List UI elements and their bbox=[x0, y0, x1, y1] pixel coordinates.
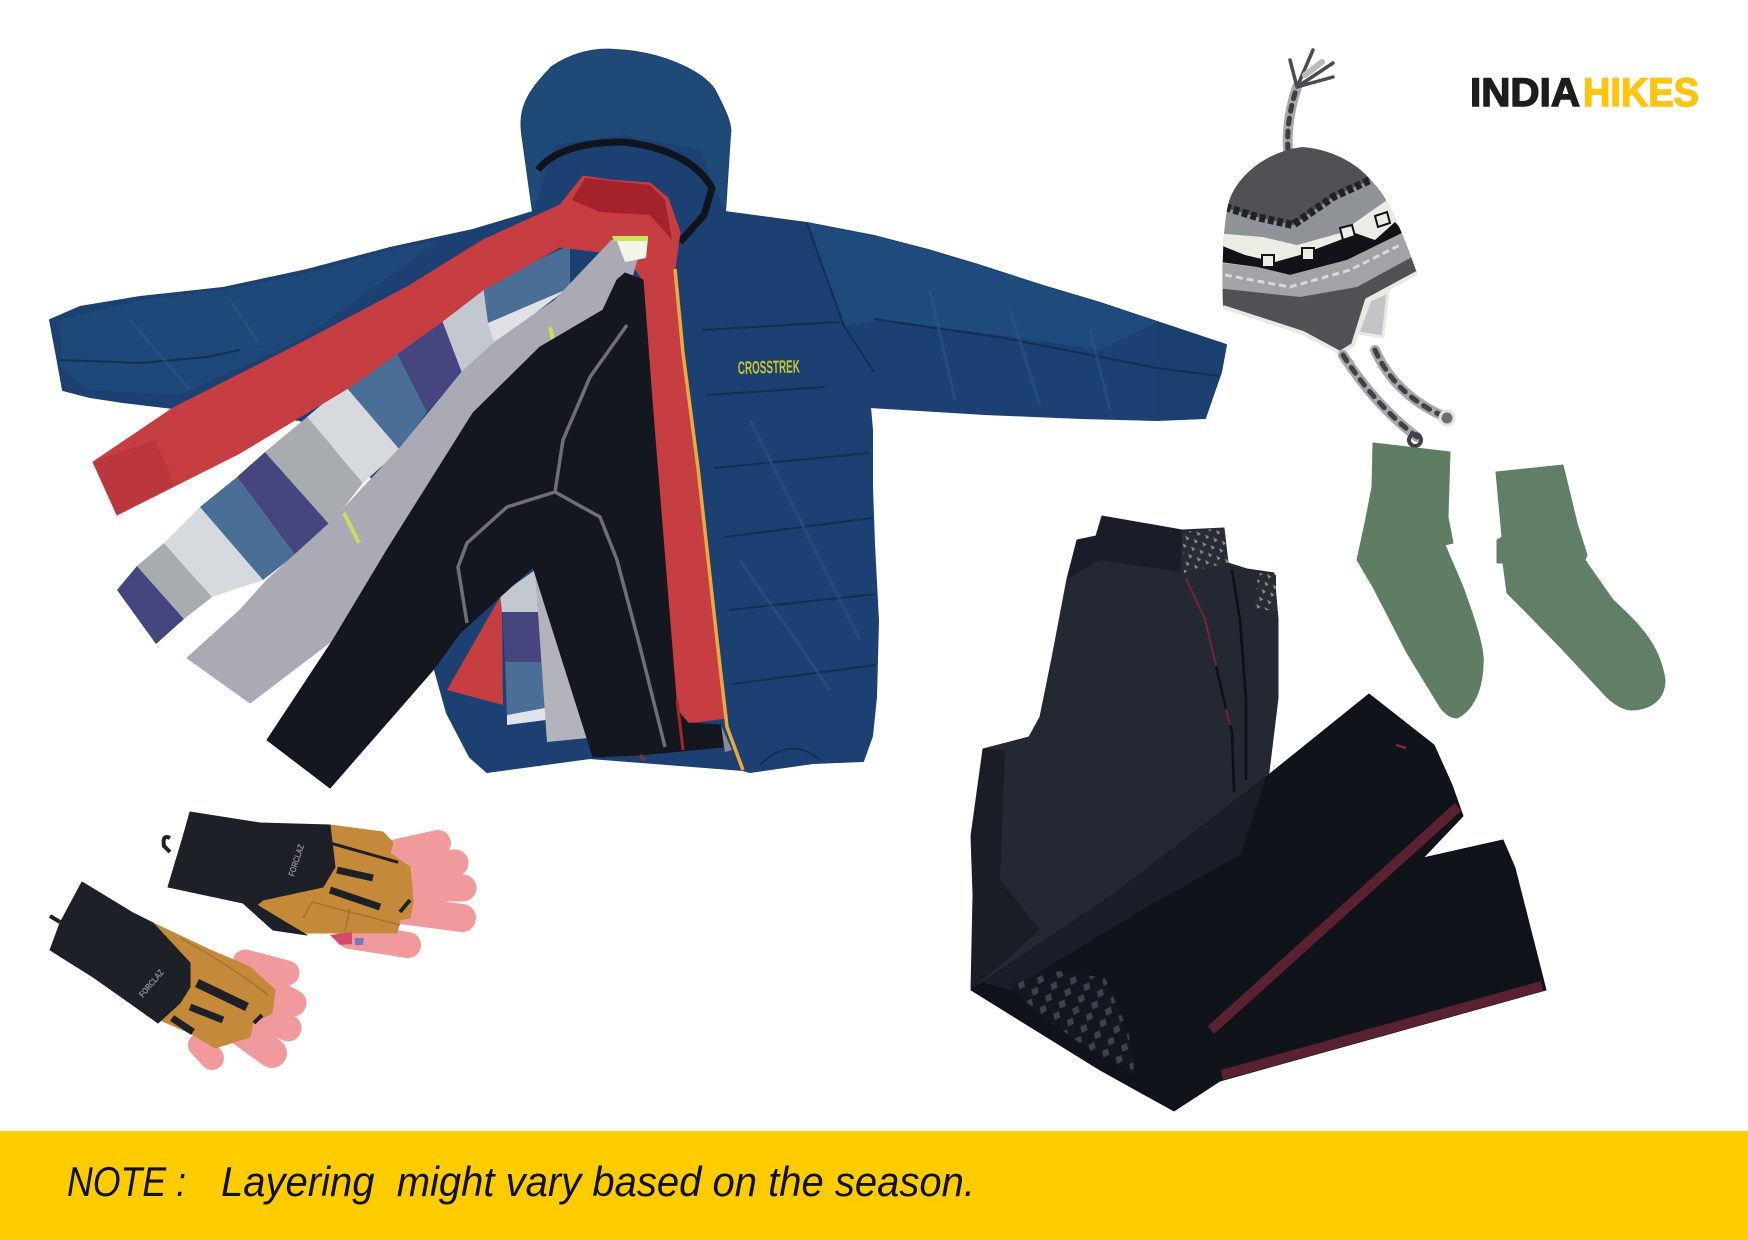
right sock bbox=[1496, 465, 1665, 710]
yellow note banner bbox=[0, 1131, 1748, 1240]
upper trouser leg bbox=[971, 516, 1278, 990]
waist panels bbox=[1182, 528, 1228, 573]
yellow zipper bbox=[675, 269, 743, 770]
red fleece layer bbox=[93, 176, 727, 723]
black trousers bbox=[971, 516, 1546, 1111]
upper glove fingers bbox=[350, 843, 463, 945]
note text: NOTE : bbox=[67, 1158, 186, 1205]
grey shell layer bbox=[187, 236, 648, 703]
pocket piping bbox=[1186, 579, 1216, 666]
wool hat bbox=[1215, 50, 1454, 446]
logo: INDIA bbox=[1470, 71, 1580, 115]
lower trouser legs bbox=[971, 694, 1546, 1111]
upper glove bbox=[164, 812, 413, 945]
green socks bbox=[1357, 443, 1665, 718]
logo bbox=[1470, 71, 1699, 115]
hat knit body bbox=[1222, 147, 1417, 351]
hat brim rim and ear lining bbox=[1358, 292, 1388, 337]
navy puffer jacket bbox=[50, 50, 1226, 772]
logo: HIKES bbox=[1583, 71, 1699, 115]
maroon stripes bbox=[1211, 807, 1542, 1075]
hood trim and drawstring bbox=[538, 142, 712, 242]
hat ear ties bbox=[1343, 350, 1454, 446]
inner folded sleeves bbox=[447, 570, 588, 742]
gloves bbox=[50, 812, 463, 1058]
hat top braid and tassel bbox=[1288, 50, 1333, 150]
lower glove: FORCLAZ bbox=[137, 967, 166, 999]
brand label on jacket: CROSSTREK bbox=[738, 356, 800, 378]
lower glove fingers bbox=[200, 962, 293, 1058]
knee grip pattern bbox=[1010, 970, 1135, 1075]
lower glove bbox=[50, 882, 275, 1048]
striped sweater layer bbox=[117, 245, 570, 644]
jacket with fanned layers bbox=[50, 50, 1226, 788]
left sock bbox=[1357, 443, 1483, 718]
black base layer bbox=[267, 273, 732, 788]
upper glove: FORCLAZ bbox=[286, 843, 306, 878]
note text: Layering might vary based on the season. bbox=[221, 1158, 975, 1205]
